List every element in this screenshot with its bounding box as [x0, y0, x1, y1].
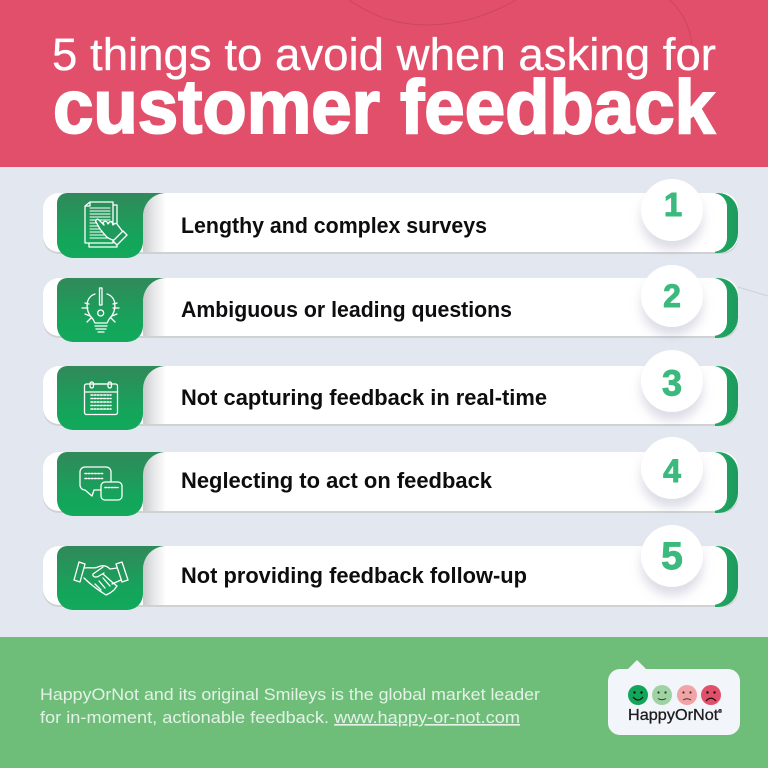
item 1 [43, 179, 738, 258]
number badge 5: 5 [661, 535, 683, 578]
icon: document with pointing hand [85, 202, 127, 247]
item 2 [43, 265, 738, 342]
title: 5 things to avoid when asking for [52, 29, 716, 80]
label 4: Neglecting to act on feedback [181, 468, 493, 493]
number badge 1: 1 [664, 186, 682, 223]
icon: speech bubbles [80, 467, 122, 500]
item 5 [43, 525, 738, 610]
label 2: Ambiguous or leading questions [181, 297, 512, 322]
number badge 2: 2 [663, 278, 681, 314]
number badge 3: 3 [662, 362, 682, 404]
title: customer feedback [53, 65, 716, 150]
smiley: very unhappy [701, 685, 721, 705]
item 3 [43, 350, 738, 430]
footer text [40, 686, 541, 727]
main background panel [0, 167, 768, 637]
smiley: unhappy [677, 685, 697, 705]
footer text: for in-moment, actionable feedback. www.happy-or-not.com [40, 709, 520, 727]
title [52, 29, 716, 150]
icon: light bulb with exclamation [82, 288, 119, 332]
logo wordmark: ® [718, 708, 722, 715]
icon: handshake [74, 562, 128, 595]
smiley: happy [652, 685, 672, 705]
number badge 3 [641, 350, 703, 412]
smiley: very happy [628, 685, 648, 705]
icon: calendar [84, 382, 118, 414]
logo wordmark: HappyOrNot [628, 707, 717, 724]
footer text: HappyOrNot and its original Smileys is the global market leader [40, 686, 541, 704]
number badge 2 [641, 265, 703, 327]
footer band [0, 637, 768, 768]
number badge 4 [641, 437, 703, 499]
logo: HappyOrNot speech bubble [608, 660, 740, 735]
label 3: Not capturing feedback in real-time [181, 385, 547, 410]
number badge 1 [641, 179, 703, 241]
number badge 5 [641, 525, 703, 587]
header band [0, 0, 768, 167]
item 4 [43, 437, 738, 516]
label 5: Not providing feedback follow-up [181, 563, 527, 588]
label 1: Lengthy and complex surveys [181, 213, 487, 238]
number badge 4: 4 [663, 453, 681, 489]
